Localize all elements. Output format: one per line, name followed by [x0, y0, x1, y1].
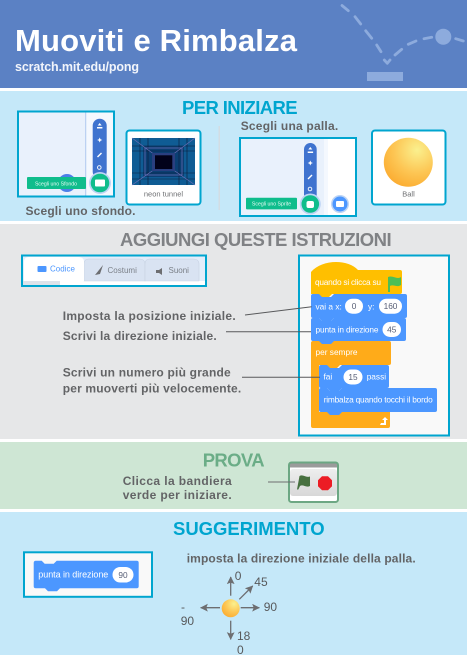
callout line: direction: [226, 331, 311, 333]
callout line: steps: [242, 376, 320, 378]
panel: header: [0, 0, 467, 88]
text: bigger number: [63, 366, 241, 396]
panel: direction block: punta in direzione: [38, 570, 108, 580]
block: forever: [311, 341, 391, 428]
panel: editor tabs: Suoni: [168, 266, 189, 275]
block: go to xy: 160: [384, 301, 398, 311]
block: go to xy: 0: [352, 301, 357, 311]
block: go to xy: vai a x:: [316, 302, 342, 312]
block: go to xy: y:: [368, 302, 374, 312]
panel: suggerimento: [0, 512, 467, 655]
heading: try it: PROVA: [203, 450, 264, 471]
text: click the green flag: verde per iniziare.: [123, 488, 232, 502]
panel: sprite button screenshot: [240, 138, 356, 216]
panel: flag and stop buttons: [289, 462, 338, 502]
text: bigger number: Scrivi un numero più grande: [63, 366, 231, 380]
subtitle url: scratch.mit.edu/pong: [15, 60, 139, 74]
panel: code blocks: [299, 256, 449, 436]
text: click the green flag: [123, 474, 232, 502]
heading: tip: SUGGERIMENTO: [173, 518, 324, 539]
block: point in direction: [311, 318, 406, 344]
panel: direction block: 90: [118, 570, 128, 580]
block: when flag clicked: quando si clicca su: [315, 277, 381, 287]
text: set start direction: Scrivi la direzione iniziale.: [63, 329, 217, 343]
panel: neon tunnel card: neon tunnel: [144, 190, 183, 199]
heading: add these blocks: AGGIUNGI QUESTE ISTRUZIONI: [120, 229, 391, 250]
diagram: direction compass: 0: [235, 569, 242, 583]
block: point in direction: 45: [387, 324, 397, 334]
caption: choose a ball: Scegli una palla.: [241, 119, 338, 133]
block: go to xy: [311, 294, 407, 321]
panel: per iniziare: [0, 91, 467, 221]
panel: aggiungi queste istruzioni: [0, 224, 467, 439]
panel: prova: [0, 442, 467, 509]
diagram: direction compass: -: [181, 600, 185, 614]
panel: ball card: [372, 130, 446, 204]
panel: backdrop button screenshot: [18, 112, 114, 196]
block: move steps: [319, 365, 389, 391]
icon: ball: [222, 599, 240, 617]
panel: direction block: [24, 552, 152, 597]
panel: editor tabs: Codice: [50, 264, 75, 274]
diagram: direction compass: 18: [237, 629, 251, 643]
diagram: direction compass: 90: [264, 600, 277, 614]
block: forever: per sempre: [316, 347, 358, 357]
title: Muoviti e Rimbalza: [15, 23, 298, 58]
panel: backdrop button screenshot: Scegli uno Sfondo: [35, 181, 77, 187]
icon: bouncing ball path: [342, 6, 463, 81]
text: bigger number: per muoverti più velocemente.: [63, 382, 241, 396]
callout line: position: [245, 307, 312, 315]
callout line: flag: [268, 481, 295, 483]
block: move steps: passi: [367, 372, 386, 382]
text: set the ball direction: imposta la direzione iniziale della palla.: [187, 552, 416, 566]
block: point in direction: punta in direzione: [316, 324, 379, 334]
panel: sprite button screenshot: Scegli uno Sprite: [252, 202, 291, 208]
icon: stop sign: [318, 476, 332, 490]
diagram: direction compass: 45: [254, 575, 268, 589]
block: bounce on edge: rimbalza quando tocchi il bordo: [324, 395, 433, 405]
text: click the green flag: Clicca la bandiera: [123, 474, 232, 488]
panel: editor tabs: Costumi: [108, 266, 137, 275]
panel: ball card: Ball: [402, 190, 415, 199]
heading: per iniziare: PER INIZIARE: [182, 97, 297, 118]
block: bounce on edge: [319, 388, 437, 415]
panel: neon tunnel card: [126, 130, 200, 204]
panel: editor tabs: [22, 256, 206, 286]
block: move steps: fai: [324, 372, 332, 382]
caption: choose a backdrop: Scegli uno sfondo.: [26, 204, 136, 218]
text: set start position: Imposta la posizione iniziale.: [63, 309, 236, 323]
diagram: direction compass: 90: [181, 614, 194, 628]
block: move steps: 15: [348, 372, 358, 382]
icon: green flag: [297, 475, 310, 490]
diagram: direction compass: [181, 569, 277, 655]
block: when flag clicked: [311, 262, 402, 297]
